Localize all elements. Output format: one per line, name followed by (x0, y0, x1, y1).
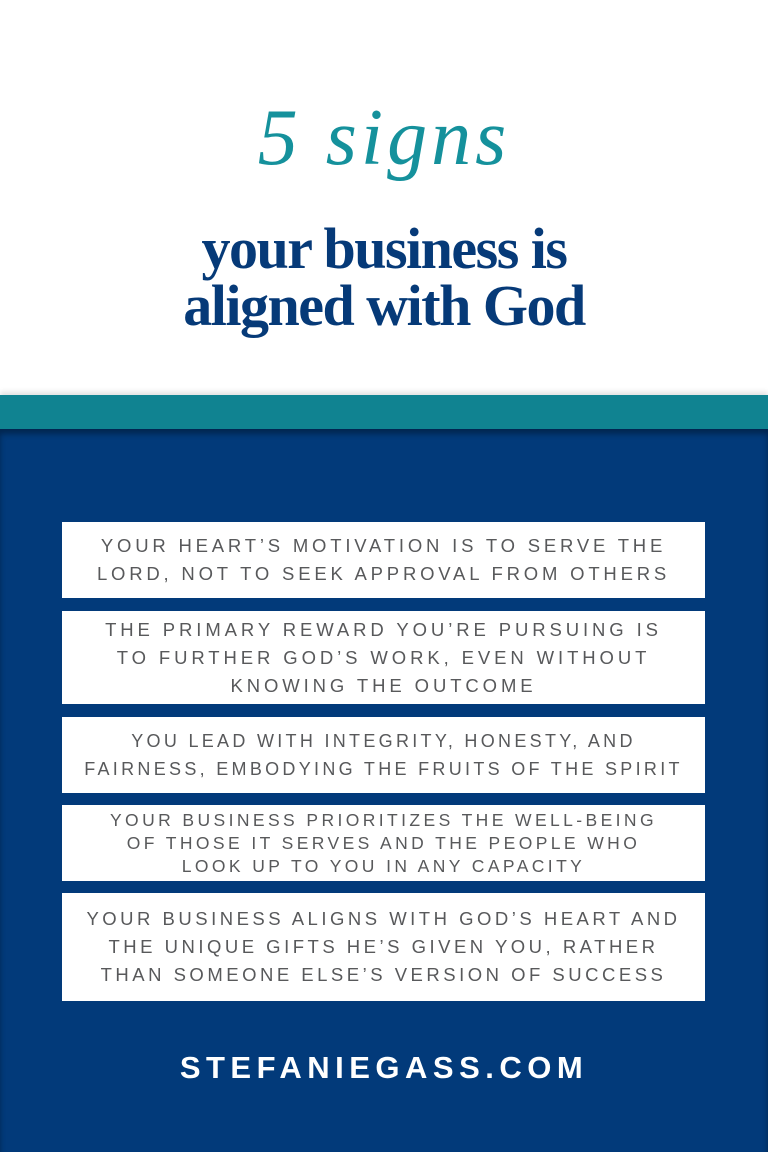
sign 2 (62, 611, 705, 704)
sign 3: YOU LEAD WITH INTEGRITY, HONESTY, AND (131, 731, 636, 751)
footer website: STEFANIEGASS.COM (180, 1050, 588, 1085)
sign 1: LORD, NOT TO SEEK APPROVAL FROM OTHERS (97, 563, 670, 584)
sign 4: YOUR BUSINESS PRIORITIZES THE WELL-BEING (110, 810, 657, 830)
teal band (0, 395, 768, 429)
sign 4 (62, 805, 705, 881)
sign 5: THAN SOMEONE ELSE’S VERSION OF SUCCESS (101, 964, 666, 985)
sign 2: KNOWING THE OUTCOME (230, 674, 537, 696)
sign 2: TO FURTHER GOD’S WORK, EVEN WITHOUT (117, 646, 650, 668)
sign 2: THE PRIMARY REWARD YOU’RE PURSUING IS (105, 618, 662, 640)
navy panel (0, 429, 768, 1152)
sign 5: THE UNIQUE GIFTS HE’S GIVEN YOU, RATHER (108, 936, 659, 957)
sign 3 (62, 717, 705, 793)
title line 1: your business is (202, 216, 566, 281)
sign 3: FAIRNESS, EMBODYING THE FRUITS OF THE SPIRIT (84, 759, 683, 779)
sign 1: YOUR HEART’S MOTIVATION IS TO SERVE THE (101, 535, 666, 556)
title line 2: aligned with God (183, 273, 585, 338)
sign 5 (62, 893, 705, 1001)
sign 1 (62, 522, 705, 598)
script heading: 5 signs: 5 signs (258, 94, 510, 182)
sign 4: OF THOSE IT SERVES AND THE PEOPLE WHO (127, 832, 640, 852)
title (183, 216, 586, 338)
sign 5: YOUR BUSINESS ALIGNS WITH GOD’S HEART AND (86, 908, 681, 929)
sign 4: LOOK UP TO YOU IN ANY CAPACITY (182, 856, 585, 876)
